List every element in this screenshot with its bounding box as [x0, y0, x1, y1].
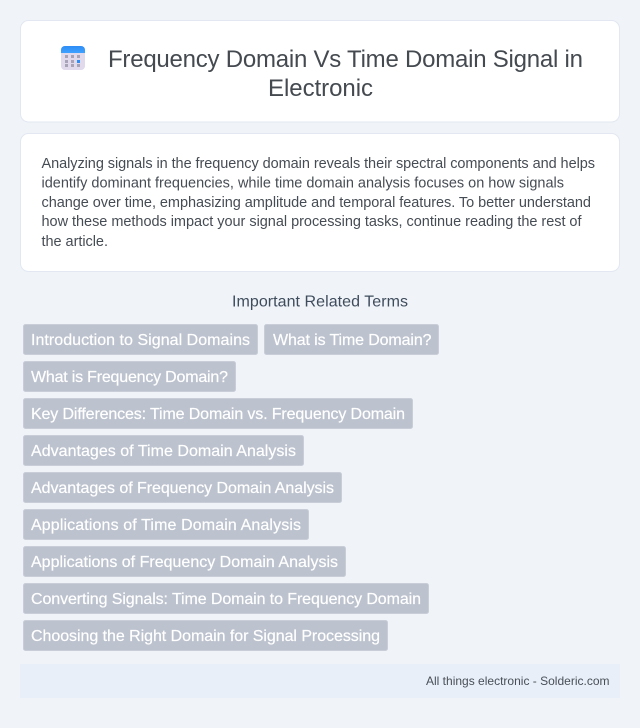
- heading: important related terms: Important Related Terms: [232, 294, 408, 310]
- panel: header: [20, 20, 620, 122]
- tag: frequency domain: [24, 362, 236, 392]
- footer text: All things electronic - Solderic.com: [426, 674, 610, 688]
- footer: [20, 664, 620, 698]
- text block: introduction: identify dominant frequencies, while time domain analysis focuses on how signals: [42, 176, 564, 192]
- tag: converting signals: [24, 584, 428, 614]
- tag: key differences: Key Differences: Time Domain vs. Frequency Domain: [31, 406, 405, 423]
- tag: advantages time: [24, 436, 304, 466]
- tag: key differences: [24, 398, 412, 428]
- title: Electronic: [268, 75, 373, 102]
- title: Frequency Domain Vs Time Domain Signal in: [108, 46, 583, 73]
- tag: converting signals: Converting Signals: Time Domain to Frequency Domain: [31, 591, 421, 608]
- tag: introduction: Introduction to Signal Domains: [31, 332, 250, 349]
- tag: frequency domain: What is Frequency Domain?: [31, 369, 228, 386]
- text block: introduction: how these methods impact your signal processing tasks, continue reading the rest of: [42, 214, 582, 230]
- tag: time domain: What is Time Domain?: [273, 332, 432, 349]
- tag: choosing domain: [24, 620, 388, 650]
- tag: applications time: Applications of Time Domain Analysis: [31, 517, 301, 534]
- tag: applications frequency: Applications of Frequency Domain Analysis: [31, 554, 338, 571]
- tag: applications frequency: [24, 546, 346, 576]
- tag: advantages frequency: [24, 472, 342, 502]
- icon: calendar: [61, 46, 85, 70]
- panel: introduction: [20, 134, 620, 272]
- tag list: [24, 324, 438, 650]
- text block: introduction: change over time, emphasizing amplitude and temporal features. To better understand: [42, 195, 591, 211]
- text block: introduction: Analyzing signals in the frequency domain reveals their spectral components and helps: [42, 156, 595, 172]
- tag: choosing domain: Choosing the Right Domain for Signal Processing: [31, 628, 380, 645]
- tag: advantages frequency: Advantages of Frequency Domain Analysis: [31, 480, 334, 497]
- text block: introduction: the article.: [42, 234, 108, 250]
- tag: applications time: [24, 510, 308, 540]
- tag: time domain: [264, 324, 438, 354]
- tag: introduction: [24, 324, 258, 354]
- tag: advantages time: Advantages of Time Domain Analysis: [31, 443, 296, 460]
